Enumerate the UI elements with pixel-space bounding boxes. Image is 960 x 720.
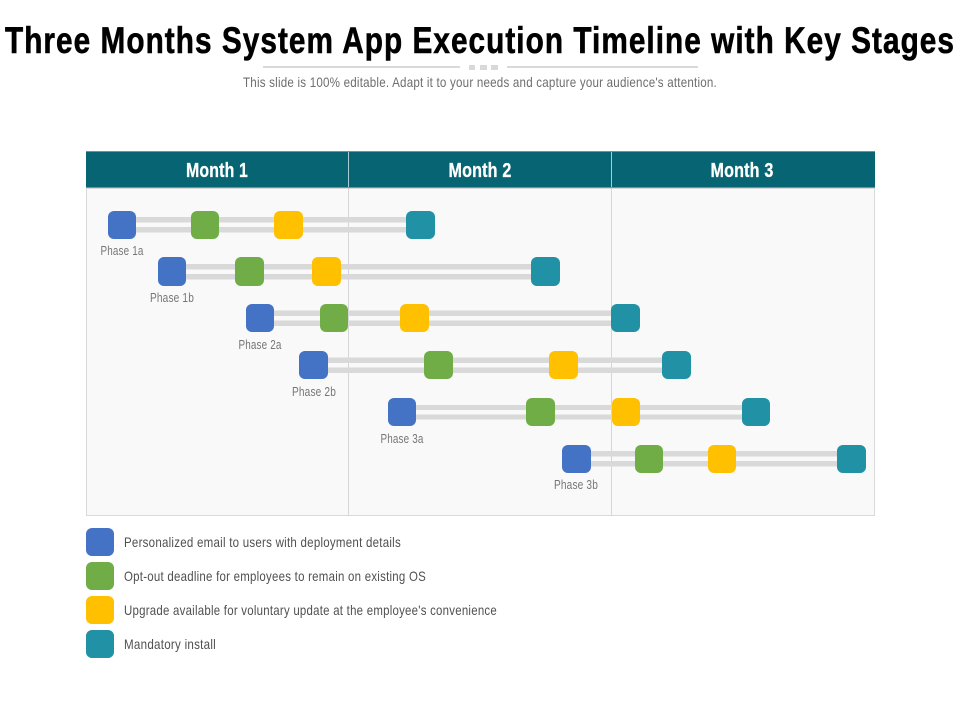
- row: Phase 2a: [238, 304, 640, 352]
- legend item: personalized email: [86, 528, 401, 556]
- legend item: personalized email: Personalized email to users with deployment details: [124, 534, 401, 550]
- row: Phase 1b: [150, 257, 560, 305]
- subtitle: This slide is 100% editable. Adapt it to your needs and capture your audience's attention.: [243, 74, 717, 90]
- row: Phase 1b: Phase 1b: [150, 291, 194, 305]
- row: Phase 3a: Phase 3a: [380, 432, 424, 446]
- row: Phase 1a: Phase 1a: [100, 244, 144, 258]
- legend item: opt-out deadline: [86, 562, 426, 590]
- panel: timeline chart: [86, 151, 875, 516]
- header: months: Month 2: [448, 160, 512, 182]
- month columns divider lines: [348, 188, 612, 516]
- header: months: Month 1: [186, 160, 248, 182]
- header: months: [86, 151, 875, 188]
- row: Phase 3b: [554, 445, 866, 492]
- legend item: mandatory install: Mandatory install: [124, 636, 216, 652]
- legend item: mandatory install: [86, 630, 216, 658]
- legend item: upgrade available: [86, 596, 497, 624]
- legend item: upgrade available: Upgrade available for voluntary update at the employee's convenience: [124, 602, 497, 618]
- row: Phase 3b: Phase 3b: [554, 478, 598, 492]
- header: months: Month 3: [710, 160, 774, 182]
- row: Phase 2b: Phase 2b: [292, 385, 336, 399]
- row: Phase 2a: Phase 2a: [238, 338, 282, 352]
- chart body: [86, 188, 874, 516]
- row: Phase 1a: [100, 211, 435, 258]
- legend: [86, 528, 497, 658]
- row: Phase 3a: [380, 398, 770, 446]
- title divider: [263, 65, 698, 70]
- legend item: opt-out deadline: Opt-out deadline for employees to remain on existing OS: [124, 568, 426, 584]
- row: Phase 2b: [292, 351, 691, 399]
